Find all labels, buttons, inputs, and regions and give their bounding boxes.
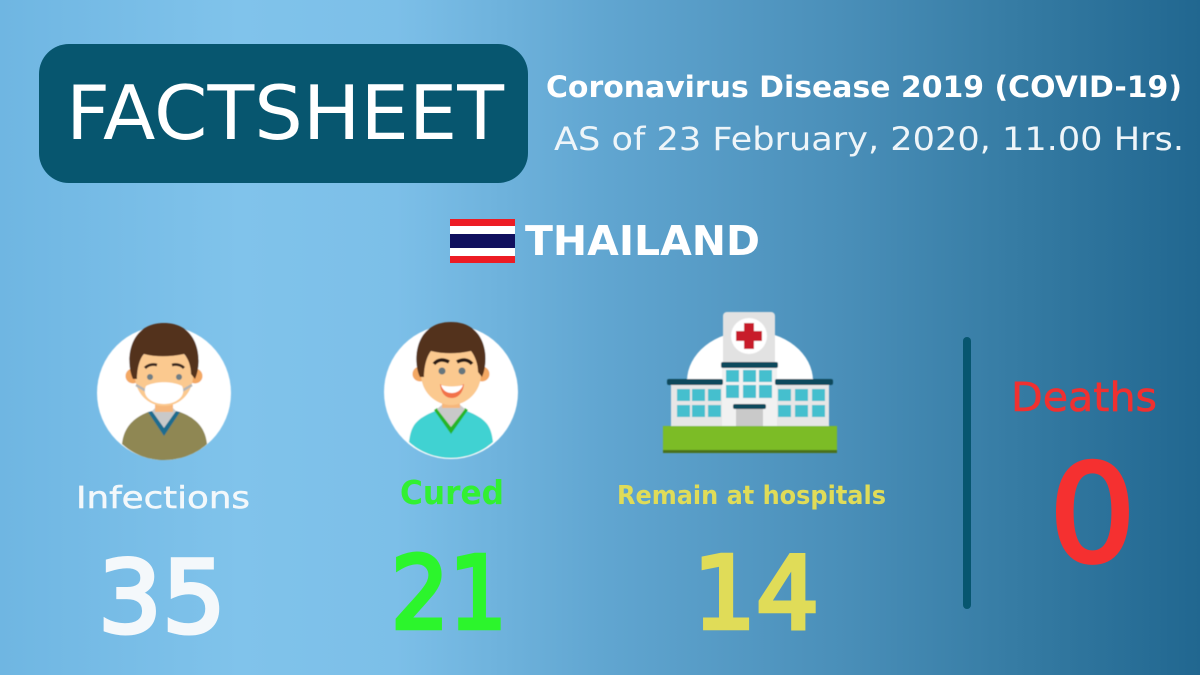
icon: cured person smiling xyxy=(384,322,518,459)
label: infections: Infections xyxy=(76,481,250,516)
label: deaths: Deaths xyxy=(1011,375,1157,421)
country label: THAILAND xyxy=(525,217,760,265)
label: cured: Cured xyxy=(400,473,504,512)
label: remain at hospitals: Remain at hospitals xyxy=(617,481,886,511)
value: deaths: 0 xyxy=(1049,436,1136,593)
heading: disease name: Coronavirus Disease 2019 (COVID-19) xyxy=(546,70,1182,104)
divider xyxy=(963,337,971,609)
factsheet badge xyxy=(39,44,528,183)
icon: hospital xyxy=(663,312,837,453)
value: cured: 21 xyxy=(391,535,507,652)
factsheet badge: FACTSHEET xyxy=(66,69,505,157)
value: remain at hospitals: 14 xyxy=(693,535,819,652)
icon: infected person with mask xyxy=(97,323,231,460)
icon: Thai flag xyxy=(450,219,515,263)
value: infections: 35 xyxy=(98,539,226,656)
date line: AS of 23 February, 2020, 11.00 Hrs. xyxy=(554,120,1184,158)
